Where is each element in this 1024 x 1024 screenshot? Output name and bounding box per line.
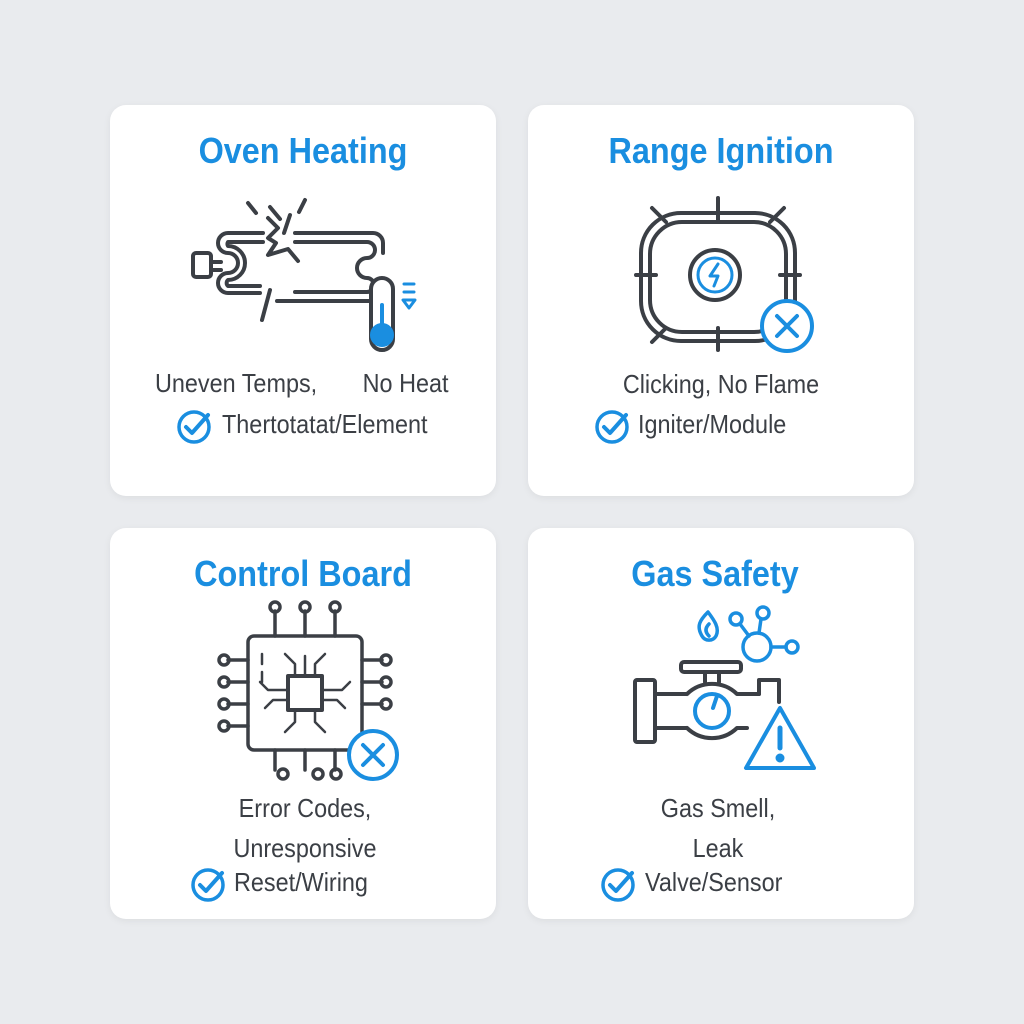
- panel: control board: [110, 528, 496, 919]
- icon: check: [595, 410, 629, 444]
- panel: gas safety: [528, 528, 914, 919]
- text: symptoms: [661, 793, 775, 863]
- panel: oven heating: [110, 105, 496, 496]
- fix line: [595, 409, 786, 444]
- text: symptoms: Clicking, No Flame: [623, 369, 819, 399]
- icon: burner with error: [634, 196, 814, 353]
- text: symptoms: Unresponsive: [233, 833, 377, 863]
- fix line: Thertotatat/Element: [222, 409, 428, 439]
- icon: check: [177, 410, 211, 444]
- fix line: Igniter/Module: [638, 409, 786, 439]
- panel: range ignition: [528, 105, 914, 496]
- text: symptoms: Uneven Temps, No Heat: [155, 368, 449, 398]
- icon: gas valve with warning: [633, 605, 816, 770]
- text: symptoms: Gas Smell,: [661, 793, 775, 823]
- fix line: Valve/Sensor: [645, 867, 782, 897]
- heading: range ignition: Range Ignition: [608, 130, 833, 171]
- icon: check: [191, 868, 225, 902]
- fix line: [191, 867, 368, 902]
- text: symptoms: [233, 793, 377, 863]
- text: symptoms: Error Codes,: [239, 793, 371, 823]
- heading: oven heating: Oven Heating: [199, 130, 407, 171]
- fix line: Reset/Wiring: [234, 867, 368, 897]
- icon: circuit board with error: [217, 600, 399, 781]
- icon: check: [601, 868, 635, 902]
- icon: broken heating element: [191, 198, 416, 352]
- text: symptoms: Leak: [693, 833, 743, 863]
- heading: control board: Control Board: [194, 553, 412, 594]
- fix line: [601, 867, 782, 902]
- heading: gas safety: Gas Safety: [631, 553, 799, 594]
